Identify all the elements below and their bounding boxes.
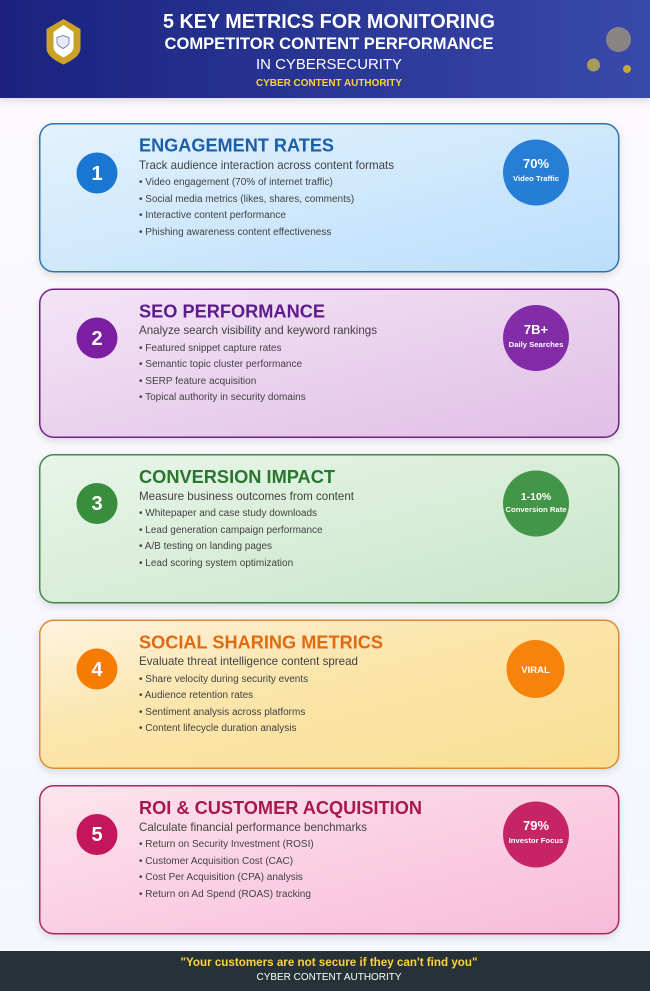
bullet list: • Content lifecycle duration analysis	[139, 723, 296, 734]
bullet list: • Semantic topic cluster performance	[139, 359, 302, 370]
heading: ROI & CUSTOMER ACQUISITION	[139, 798, 422, 818]
bullet list: • SERP feature acquisition	[139, 376, 256, 387]
panel: ROI and customer acquisition	[40, 786, 619, 934]
stat: 79%	[503, 802, 569, 868]
bullet list: • Audience retention rates	[139, 690, 253, 701]
panel: engagement rates	[40, 124, 619, 272]
stat: 1-10%: 1-10%	[521, 491, 552, 503]
stat: 70%: Video Traffic	[513, 174, 560, 183]
title line 3: IN CYBERSECURITY	[256, 56, 402, 73]
brand line: CYBER CONTENT AUTHORITY	[256, 78, 402, 89]
stat: 7B+	[503, 305, 569, 371]
heading: CONVERSION IMPACT	[139, 467, 335, 487]
panel: social sharing metrics	[40, 620, 619, 768]
number badge 4	[76, 648, 118, 690]
panel: conversion impact	[40, 455, 619, 603]
number badge 3	[76, 483, 118, 524]
stat: viral	[506, 640, 564, 698]
bullet list: • Phishing awareness content effectiveness	[139, 227, 331, 238]
number badge 5	[76, 814, 118, 855]
bullet list: • Social media metrics (likes, shares, comments)	[139, 194, 354, 205]
bullet list: • A/B testing on landing pages	[139, 541, 272, 552]
icon: shield	[46, 19, 80, 64]
bullet list: • Customer Acquisition Cost (CAC)	[139, 856, 293, 867]
subtitle: Measure business outcomes from content	[139, 489, 355, 503]
bullet list: • Lead generation campaign performance	[139, 525, 323, 536]
bullet list: • Featured snippet capture rates	[139, 343, 281, 354]
bullet list: • Sentiment analysis across platforms	[139, 707, 305, 718]
bullet list: • Topical authority in security domains	[139, 392, 306, 403]
heading: SOCIAL SHARING METRICS	[139, 632, 383, 652]
bullet list: • Video engagement (70% of internet traffic)	[139, 177, 333, 188]
stat: 70%: 70%	[523, 156, 549, 171]
title line 2: COMPETITOR CONTENT PERFORMANCE	[164, 34, 494, 53]
number badge 5: 5	[91, 824, 103, 846]
heading: ENGAGEMENT RATES	[139, 136, 334, 156]
decorative dots	[587, 27, 631, 73]
bullet list: • Lead scoring system optimization	[139, 558, 293, 569]
number badge 3: 3	[91, 493, 103, 515]
stat: 70%	[503, 140, 569, 206]
subtitle: Track audience interaction across content formats	[139, 158, 394, 172]
number badge 2	[76, 318, 118, 358]
footer band	[0, 951, 650, 991]
number badge 1	[76, 152, 118, 194]
bullet list: • Share velocity during security events	[139, 674, 308, 685]
footer brand: CYBER CONTENT AUTHORITY	[256, 972, 402, 983]
stat: 1-10%: Conversion Rate	[505, 505, 567, 514]
bullet list: • Whitepaper and case study downloads	[139, 508, 317, 519]
number badge 4: 4	[91, 659, 103, 681]
stat: 79%: 79%	[523, 818, 549, 833]
bullet list: • Return on Security Investment (ROSI)	[139, 839, 314, 850]
bullet list	[139, 177, 354, 238]
number badge 1: 1	[91, 163, 103, 185]
stat: 79%: Investor Focus	[509, 836, 563, 845]
subtitle: Evaluate threat intelligence content spread	[139, 654, 358, 668]
stat: 7B+: Daily Searches	[509, 340, 563, 349]
stat: 1-10%	[503, 470, 569, 536]
bullet list: • Interactive content performance	[139, 210, 286, 221]
bullet list	[139, 839, 314, 900]
subtitle: Calculate financial performance benchmarks	[139, 820, 367, 834]
bullet list: • Cost Per Acquisition (CPA) analysis	[139, 872, 303, 883]
heading: SEO PERFORMANCE	[139, 302, 325, 322]
stat: 7B+: 7B+	[524, 322, 549, 337]
stat: viral: VIRAL	[521, 665, 550, 676]
panel: SEO performance	[40, 289, 619, 437]
bullet list	[139, 508, 323, 569]
footer quote: "Your customers are not secure if they can't find you"	[180, 955, 478, 969]
bullet list	[139, 343, 306, 403]
header band	[0, 0, 650, 98]
number badge 2: 2	[91, 328, 103, 350]
title line 1: 5 KEY METRICS FOR MONITORING	[163, 11, 495, 33]
bullet list	[139, 674, 308, 734]
bullet list: • Return on Ad Spend (ROAS) tracking	[139, 889, 311, 900]
subtitle: Analyze search visibility and keyword rankings	[139, 323, 377, 337]
